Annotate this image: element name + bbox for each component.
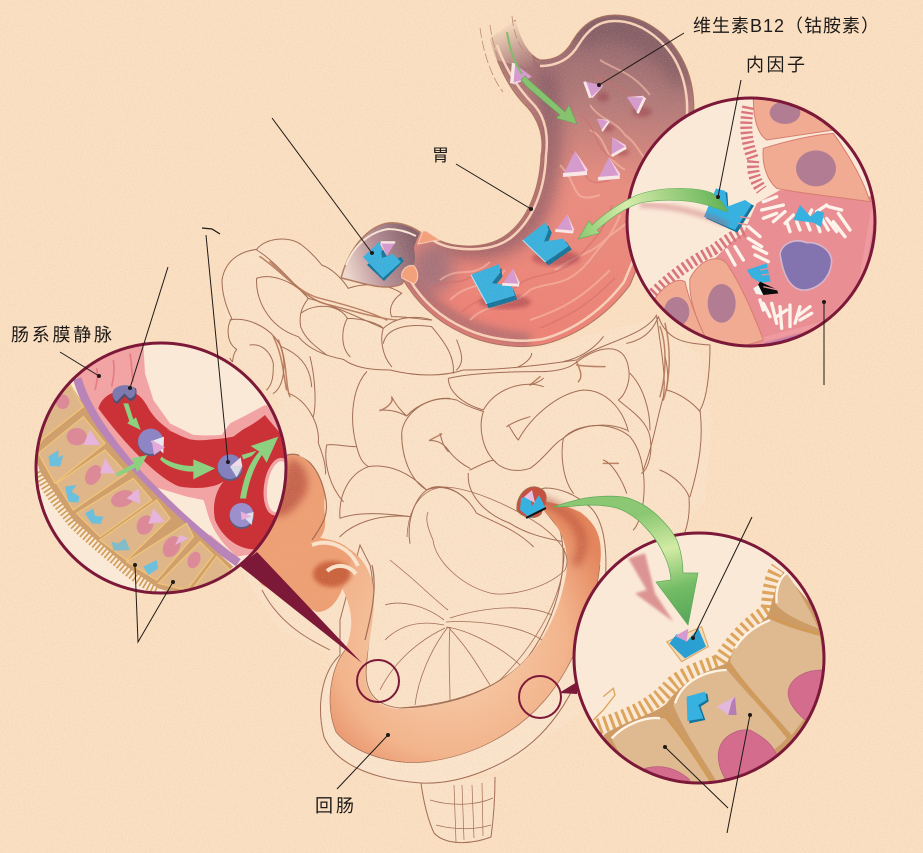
arrow shadow in stomach circle xyxy=(640,205,728,225)
right hole xyxy=(264,458,284,516)
green arrows in vein xyxy=(116,403,278,499)
mesentery fan xyxy=(380,487,567,708)
pyloric flaps xyxy=(402,231,440,284)
leader lines xyxy=(60,33,824,833)
cell borders xyxy=(665,616,820,783)
duodenal bulb xyxy=(341,223,420,287)
B12 discs in vein xyxy=(112,385,254,529)
gastric cells xyxy=(655,97,870,353)
ileum window with complex xyxy=(517,487,546,518)
magnified vein and enterocyte circle xyxy=(30,343,295,600)
pale folds xyxy=(300,454,358,574)
red lumen xyxy=(98,390,290,549)
label: intrinsic factor: 内因子 xyxy=(746,55,805,75)
red arrow shadow xyxy=(628,553,673,622)
purple basement membrane xyxy=(77,378,238,563)
intestines line drawing xyxy=(222,239,712,843)
esophagus fade xyxy=(482,20,535,70)
tan cell mass xyxy=(603,572,833,793)
ileum cut-away xyxy=(240,454,606,783)
wedge to small ileum circle xyxy=(240,552,362,663)
colon and small bowel outlines xyxy=(222,239,710,547)
arrow: ileum to villi circle xyxy=(553,496,698,625)
label: ileum: 回肠 xyxy=(315,796,354,816)
cream gap xyxy=(203,500,235,555)
enterocyte backing xyxy=(30,383,233,600)
lower stump xyxy=(421,777,495,843)
enterocytes xyxy=(35,385,230,590)
villi fringe xyxy=(38,472,158,590)
leader dots xyxy=(97,83,826,749)
lamina propria xyxy=(715,190,874,344)
small ileum circles xyxy=(357,660,561,718)
mesentery folds xyxy=(260,257,669,463)
label: stomach: 胃 xyxy=(432,146,449,165)
magnified intrinsic factor blocks xyxy=(704,188,824,295)
vitamin B12 triangles in stomach xyxy=(508,63,648,181)
absorbed block and triangle xyxy=(687,692,737,723)
arrow: intrinsic factor to stomach xyxy=(578,188,728,239)
villi xyxy=(598,568,778,727)
villi combs on gastric cells xyxy=(653,107,762,293)
fold shading xyxy=(440,70,551,248)
white branching frills xyxy=(727,197,850,328)
intrinsic factor block complexes in stomach xyxy=(363,213,580,309)
goblet nucleus xyxy=(780,241,832,290)
vein wall xyxy=(77,343,290,557)
pink triangles in cells xyxy=(83,430,188,545)
pink valve strips xyxy=(165,405,267,520)
magnified stomach lining circle xyxy=(627,97,887,353)
frill strands over blocks xyxy=(738,217,778,290)
label: mesenteric vein: 肠系膜静脉 xyxy=(11,325,112,345)
ileum lumen xyxy=(330,500,601,763)
ascending ileum orange xyxy=(240,454,352,612)
intrinsic factor docked on villi xyxy=(667,627,708,662)
magnified villi circle xyxy=(574,533,833,793)
stomach wall and lumen xyxy=(402,15,694,347)
pink nuclei xyxy=(645,670,827,787)
arrow: food entering stomach xyxy=(507,32,577,124)
label: vitamin B12: 维生素B12（钴胺素） xyxy=(693,16,879,36)
shadows under vitamin B12 xyxy=(597,92,652,156)
pale blue fragments in cells xyxy=(48,450,158,575)
small circle connector xyxy=(559,682,577,694)
